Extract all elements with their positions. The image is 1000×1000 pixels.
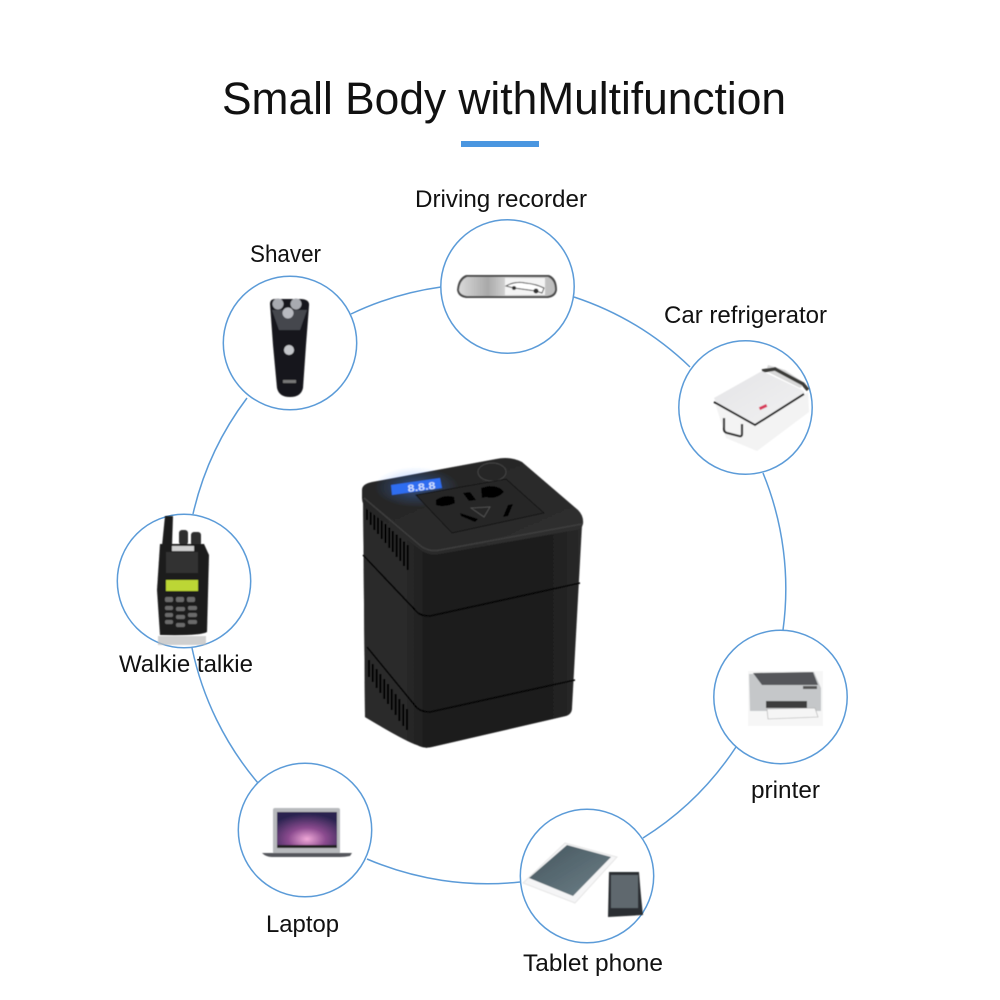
connecting ring arcs	[192, 287, 786, 884]
node: car refrigerator	[679, 341, 812, 474]
title underline accent	[461, 141, 539, 147]
LCD display	[391, 478, 442, 495]
node: walkie talkie	[117, 514, 251, 648]
upper vents	[367, 505, 408, 570]
label: printer: printer	[751, 777, 820, 804]
label: car refrigerator: Car refrigerator	[664, 302, 827, 329]
power button	[478, 463, 506, 481]
node: laptop	[238, 763, 372, 897]
socket panel	[416, 479, 544, 533]
product seams	[363, 555, 580, 712]
node: shaver	[223, 276, 357, 410]
lower vents	[369, 660, 407, 730]
title: Small Body withMultifunction	[222, 73, 786, 124]
label: shaver: Shaver	[250, 241, 321, 268]
label: walkie talkie: Walkie talkie	[119, 651, 253, 678]
LCD display: 8.8.8	[407, 481, 437, 495]
LCD glow	[374, 467, 458, 507]
node: printer	[714, 630, 847, 764]
node: tablet phone	[520, 809, 654, 943]
cap lip shading	[364, 498, 582, 551]
central product: power inverter	[362, 458, 583, 748]
label: laptop: Laptop	[266, 911, 339, 938]
top cap	[362, 458, 583, 555]
label: driving recorder: Driving recorder	[415, 186, 587, 213]
label: tablet phone: Tablet phone	[523, 950, 663, 977]
node: driving recorder	[441, 220, 574, 353]
